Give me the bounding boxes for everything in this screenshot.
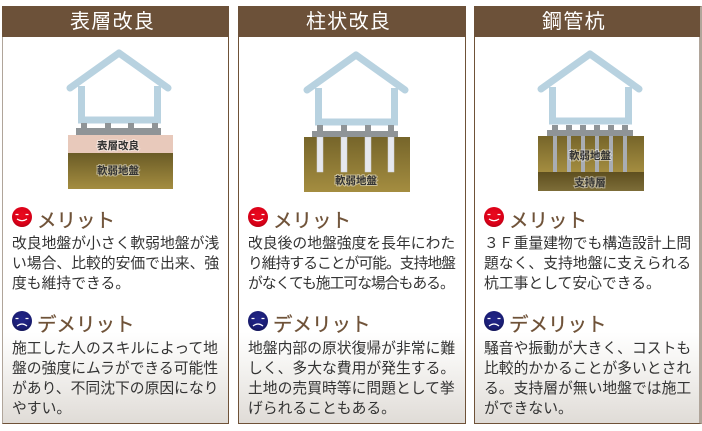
diagram: steel pipe pile house: 軟弱地盤 xyxy=(569,149,611,162)
heading: 表層改良: 表層改良 xyxy=(70,11,155,33)
text: demerit: やすい。 xyxy=(12,401,71,417)
heading: メリット: メリット xyxy=(273,210,351,232)
text: merit xyxy=(484,235,691,292)
text: demerit: 比較的かかることが多いとされ xyxy=(484,361,691,377)
icon: frown xyxy=(248,311,268,331)
text: merit: がなくても施工可な場合もある。 xyxy=(248,276,454,292)
panel: 鋼管杭 xyxy=(474,6,702,424)
heading: デメリット: デメリット xyxy=(273,314,371,336)
diagram: column improvement house xyxy=(304,51,410,192)
heading: メリット: メリット xyxy=(37,210,115,232)
heading: 柱状改良 xyxy=(238,6,466,37)
heading: 鋼管杭 xyxy=(474,6,700,37)
icon: frown xyxy=(484,311,504,331)
diagram: steel pipe pile house: 支持層 xyxy=(574,176,606,189)
text: demerit xyxy=(12,340,219,417)
heading: 鋼管杭: 鋼管杭 xyxy=(542,11,606,33)
diagram: surface improvement house: 表層改良 xyxy=(97,139,139,152)
icon: frown xyxy=(12,311,32,331)
text: merit: ３Ｆ重量建物でも構造設計上問 xyxy=(484,236,691,252)
text: merit: 改良地盤が小さく軟弱地盤が浅 xyxy=(12,236,219,252)
diagram: surface improvement house xyxy=(66,49,173,189)
text: demerit: ができない。 xyxy=(484,401,573,417)
heading: デメリット: デメリット xyxy=(37,314,135,336)
icon: smile xyxy=(248,207,268,227)
panel: 表層改良 xyxy=(2,6,229,424)
text: demerit: 土地の売買時等に問題として挙 xyxy=(248,381,455,397)
text: demerit: る。支持層が無い地盤では施工 xyxy=(484,381,691,397)
heading: メリット: メリット xyxy=(509,210,587,232)
text: merit: 杭工事として安心できる。 xyxy=(484,276,661,292)
diagram: column improvement house: 軟弱地盤 xyxy=(335,174,377,187)
text: demerit: 施工した人のスキルによって地 xyxy=(12,341,218,357)
text: merit: 改良後の地盤強度を長年にわた xyxy=(248,236,455,252)
heading: デメリット: デメリット xyxy=(509,314,607,336)
icon: smile xyxy=(12,207,32,227)
diagram: steel pipe pile house xyxy=(538,50,644,191)
heading: 柱状改良: 柱状改良 xyxy=(306,11,391,33)
text: merit xyxy=(12,235,219,292)
heading: 表層改良 xyxy=(2,6,229,37)
text: merit: 度も維持できる。 xyxy=(12,276,130,292)
panel: 柱状改良 xyxy=(238,6,466,424)
text: merit: 題なく、支持地盤に支えられる xyxy=(484,256,691,272)
text: demerit: 騒音や振動が大きく、コストも xyxy=(484,341,691,357)
icon: smile xyxy=(484,207,504,227)
text: demerit: 地盤内部の原状復帰が非常に難 xyxy=(248,341,455,357)
diagram: surface improvement house: 軟弱地盤 xyxy=(97,164,139,177)
text: demerit: しく、多大な費用が発生する。 xyxy=(248,361,455,377)
text: demerit xyxy=(248,340,455,417)
text: merit: り維持することが可能。支持地盤 xyxy=(248,256,455,272)
text: demerit xyxy=(484,340,691,417)
text: demerit: 盤の強度にムラができる可能性 xyxy=(12,361,218,377)
text: merit xyxy=(248,235,456,292)
text: demerit: げられることもある。 xyxy=(248,401,396,417)
text: merit: い場合、比較的安価で出来、強 xyxy=(12,256,219,272)
text: demerit: があり、不同沈下の原因になり xyxy=(12,381,219,397)
